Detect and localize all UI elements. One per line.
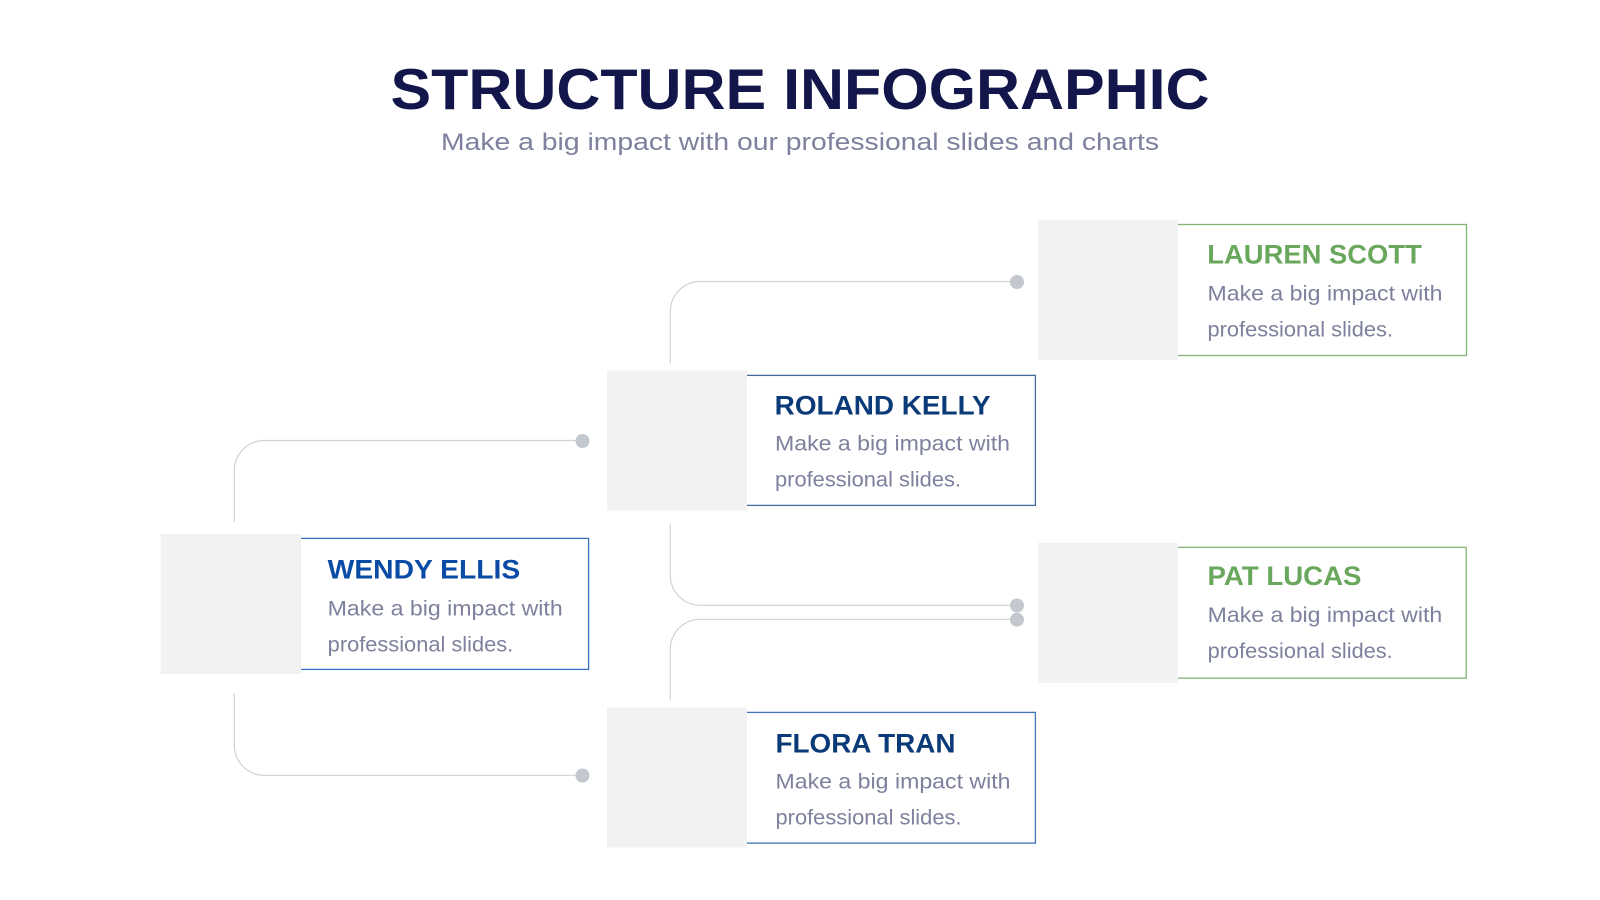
description: Pat Lucas: Make a big impact with xyxy=(1208,604,1442,627)
image placeholder: Roland Kelly xyxy=(607,370,747,510)
description: Roland Kelly: professional slides. xyxy=(775,468,961,491)
description: Wendy Ellis: Make a big impact with xyxy=(328,597,563,620)
connector: Wendy Ellis to Roland Kelly xyxy=(234,434,590,522)
panel: Roland Kelly xyxy=(607,370,1035,510)
description: Lauren Scott: Make a big impact with xyxy=(1208,282,1442,305)
description: Pat Lucas: professional slides. xyxy=(1208,640,1393,663)
name: Lauren Scott: LAUREN SCOTT xyxy=(1207,239,1422,269)
description: Flora Tran: Make a big impact with xyxy=(776,771,1010,794)
name: Wendy Ellis: WENDY ELLIS xyxy=(328,554,520,584)
description: Roland Kelly: Make a big impact with xyxy=(775,432,1010,455)
name: Roland Kelly: ROLAND KELLY xyxy=(775,390,991,420)
panel: Flora Tran xyxy=(607,708,1035,848)
panel: Pat Lucas xyxy=(1038,543,1466,683)
connector: Wendy Ellis to Flora Tran xyxy=(234,694,590,782)
title: STRUCTURE INFOGRAPHIC xyxy=(390,58,1210,122)
name: Flora Tran: FLORA TRAN xyxy=(776,729,956,759)
image placeholder: Pat Lucas xyxy=(1038,543,1178,683)
subtitle: Make a big impact with our professional slides and charts xyxy=(441,129,1159,156)
name: Pat Lucas: PAT LUCAS xyxy=(1208,561,1362,591)
image placeholder: Wendy Ellis xyxy=(161,534,301,674)
description: Lauren Scott: professional slides. xyxy=(1208,318,1393,341)
connector: Flora Tran to Pat Lucas xyxy=(670,613,1024,700)
panel: Wendy Ellis xyxy=(161,534,589,674)
image placeholder: Flora Tran xyxy=(607,708,747,848)
description: Flora Tran: professional slides. xyxy=(776,807,962,830)
panel: Lauren Scott xyxy=(1038,220,1466,360)
connector: Roland Kelly to Pat Lucas xyxy=(670,524,1024,612)
connector: Roland Kelly to Lauren Scott xyxy=(670,275,1024,363)
description: Wendy Ellis: professional slides. xyxy=(328,633,513,656)
image placeholder: Lauren Scott xyxy=(1038,220,1178,360)
